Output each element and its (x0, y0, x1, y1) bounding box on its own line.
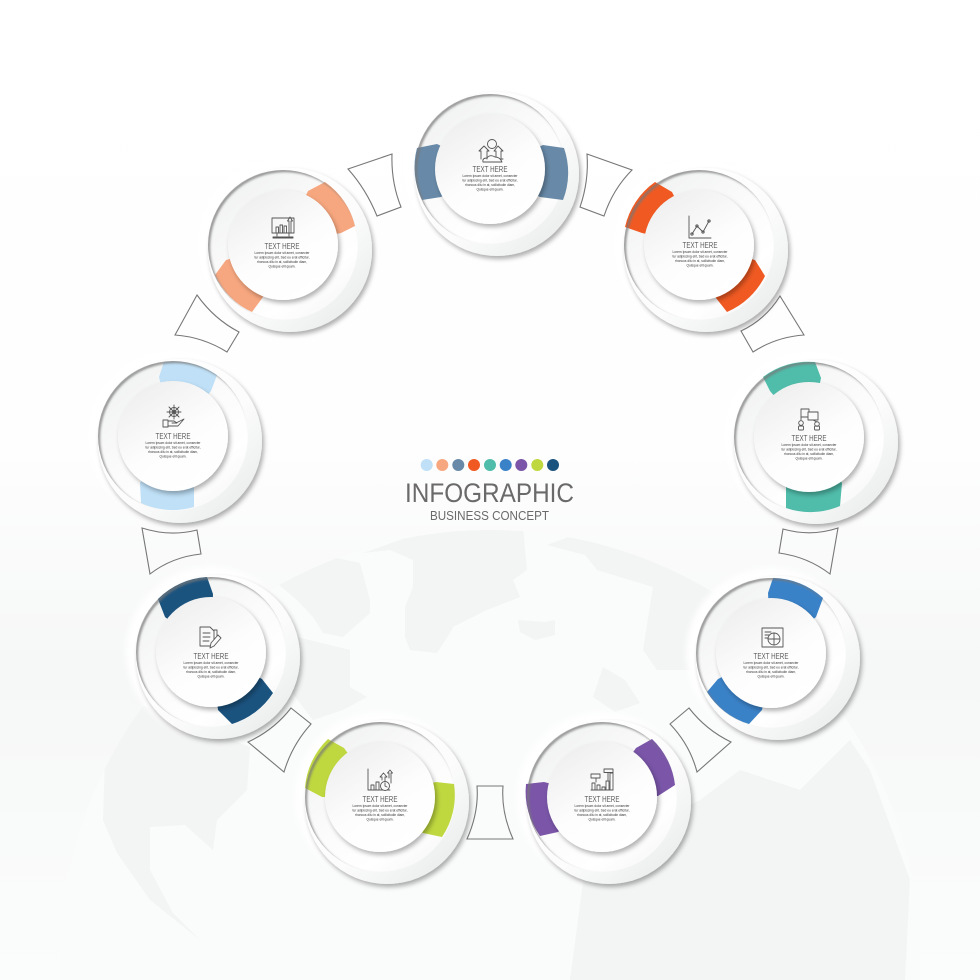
center disc with content: Lorem Ipsum dolor sit amet, consecter (254, 250, 310, 255)
step 5: purple (517, 712, 691, 884)
center disc with content: tur adipiscing elit, Sed eu erat efficitur, (254, 254, 310, 260)
base discs (405, 84, 579, 256)
center disc with content (734, 362, 888, 516)
center disc with content: TEXT HERE (264, 242, 300, 251)
step 7: navy (126, 567, 300, 739)
center disc with content (136, 578, 290, 730)
step 8: light blue (88, 351, 262, 523)
center disc with content (98, 362, 252, 514)
center disc with content: Lorem Ipsum dolor sit amet, consecter (744, 660, 799, 665)
connector 8-9 (175, 295, 239, 352)
icon: people and magnifier (479, 140, 503, 162)
base discs (88, 351, 262, 523)
base discs (126, 567, 300, 739)
center disc with content: rhoncus dliu in at, sollicitudin diam, (186, 669, 236, 674)
color bands (526, 739, 675, 836)
center disc with content: Lorem Ipsum dolor sit amet, consecter (574, 803, 630, 808)
color bands (305, 739, 455, 837)
base discs (295, 712, 469, 884)
step 6: lime (295, 712, 469, 884)
center disc with content (696, 578, 850, 732)
center disc with content: Lorem Ipsum dolor sit amet, consecter (462, 173, 518, 178)
center disc with content: rhoncus dliu in at, sollicitudin diam, (746, 669, 796, 674)
connector 4-5 (670, 708, 731, 772)
center disc with content: Lorem Ipsum dolor sit amet, consecter (146, 440, 201, 445)
center disc with content: TEXT HERE (682, 241, 718, 250)
center disc with content: Lorem Ipsum dolor sit amet, consecter (184, 660, 239, 665)
connector 6-7 (248, 708, 311, 772)
connectors (142, 154, 838, 839)
color bands (707, 578, 823, 724)
color bands (414, 144, 568, 200)
color bands (625, 182, 765, 312)
center disc with content: Quisque elit quam. (476, 186, 504, 192)
icon: monitor with bars (272, 217, 294, 238)
base discs (724, 352, 898, 524)
center disc with content: Lorem Ipsum dolor sit amet, consecter (352, 803, 408, 808)
center disc with content: Quisque elit quam. (366, 816, 394, 822)
center disc with content: tur adipiscing elit, Sed eu erat efficitur, (146, 444, 200, 450)
step 2: red orange (614, 160, 788, 332)
center disc with content: tur adipiscing elit, Sed eu erat efficitur, (782, 446, 836, 452)
center disc with content (624, 170, 778, 324)
icon: bar chart with flags (591, 769, 613, 790)
connector 2-3 (741, 296, 804, 352)
color bands (763, 362, 842, 512)
icon: report with pie chart (762, 628, 783, 647)
center disc with content (528, 722, 680, 876)
center disc with content (208, 170, 362, 324)
icon: document with pencil (200, 627, 221, 648)
center disc with content (416, 94, 568, 248)
center disc with content: tur adipiscing elit, Sed eu erat efficitur, (574, 808, 630, 812)
center disc with content: TEXT HERE (472, 165, 508, 174)
title: INFOGRAPHIC (405, 478, 574, 508)
center disc with content: TEXT HERE (156, 432, 190, 441)
color bands (215, 182, 355, 312)
center disc with content: TEXT HERE (362, 795, 398, 804)
base discs (517, 712, 691, 884)
center disc with content: TEXT HERE (584, 795, 620, 804)
icon: hand holding gear wheel (163, 405, 184, 427)
base discs (198, 160, 372, 332)
center disc with content: Quisque elit quam. (588, 816, 616, 822)
subtitle: BUSINESS CONCEPT (430, 509, 549, 523)
connector 1-2 (580, 154, 632, 216)
center disc with content: Quisque elit quam. (686, 262, 714, 268)
connector 7-8 (142, 528, 201, 574)
step 9: peach (198, 160, 372, 332)
connector 9-1 (348, 154, 401, 216)
connector 3-4 (779, 528, 838, 574)
base discs (614, 160, 788, 332)
center disc with content: rhoncus dliu in at, sollicitudin diam, (784, 451, 834, 456)
center disc with content: Quisque elit quam. (758, 674, 784, 678)
center disc with content: tur adipiscing elit, Sed eu erat efficitur, (744, 664, 798, 670)
center disc with content: tur adipiscing elit, Sed eu erat efficitur, (672, 254, 728, 258)
center title block (405, 459, 574, 523)
world globe watermark (60, 525, 920, 980)
center disc with content: tur adipiscing elit, Sed eu erat efficitur, (184, 664, 238, 670)
color bands (158, 577, 273, 724)
center disc with content: Lorem Ipsum dolor sit amet, consecter (782, 442, 837, 447)
center disc with content: rhoncus dliu in at, sollicitudin diam, (355, 812, 405, 817)
center disc with content: tur adipiscing elit, Sed eu erat efficitur, (352, 808, 408, 812)
step 1: slate (405, 84, 579, 256)
center disc with content: tur adipiscing elit, Sed eu erat efficitur, (462, 178, 518, 182)
center disc with content: Quisque elit quam. (160, 454, 186, 458)
center disc with content: Quisque elit quam. (268, 264, 296, 268)
step 4: blue (686, 568, 860, 740)
center disc with content: rhoncus dliu in at, sollicitudin diam, (465, 182, 515, 187)
color bands (140, 361, 217, 510)
icon: growth chart with clock (368, 769, 392, 790)
step 3: teal (724, 352, 898, 524)
base discs (686, 568, 860, 740)
center disc with content: rhoncus dliu in at, sollicitudin diam, (148, 449, 198, 454)
center disc with content: TEXT HERE (194, 652, 228, 661)
center disc with content: Lorem Ipsum dolor sit amet, consecter (672, 249, 728, 254)
center disc with content: TEXT HERE (792, 434, 826, 443)
connector 5-6 (467, 786, 513, 839)
icon: organization chart (798, 409, 820, 430)
center disc with content: rhoncus dliu in at, sollicitudin diam, (675, 258, 725, 263)
color dots (421, 459, 559, 471)
center disc with content: Quisque elit quam. (796, 456, 822, 460)
center disc with content (306, 722, 458, 876)
center disc with content: rhoncus dliu in at, sollicitudin diam, (577, 812, 627, 817)
center disc with content: TEXT HERE (754, 652, 788, 661)
center disc with content: rhoncus dliu in at, sollicitudin diam, (257, 259, 307, 264)
center disc with content: Quisque elit quam. (198, 674, 224, 678)
icon: line chart (689, 216, 711, 238)
